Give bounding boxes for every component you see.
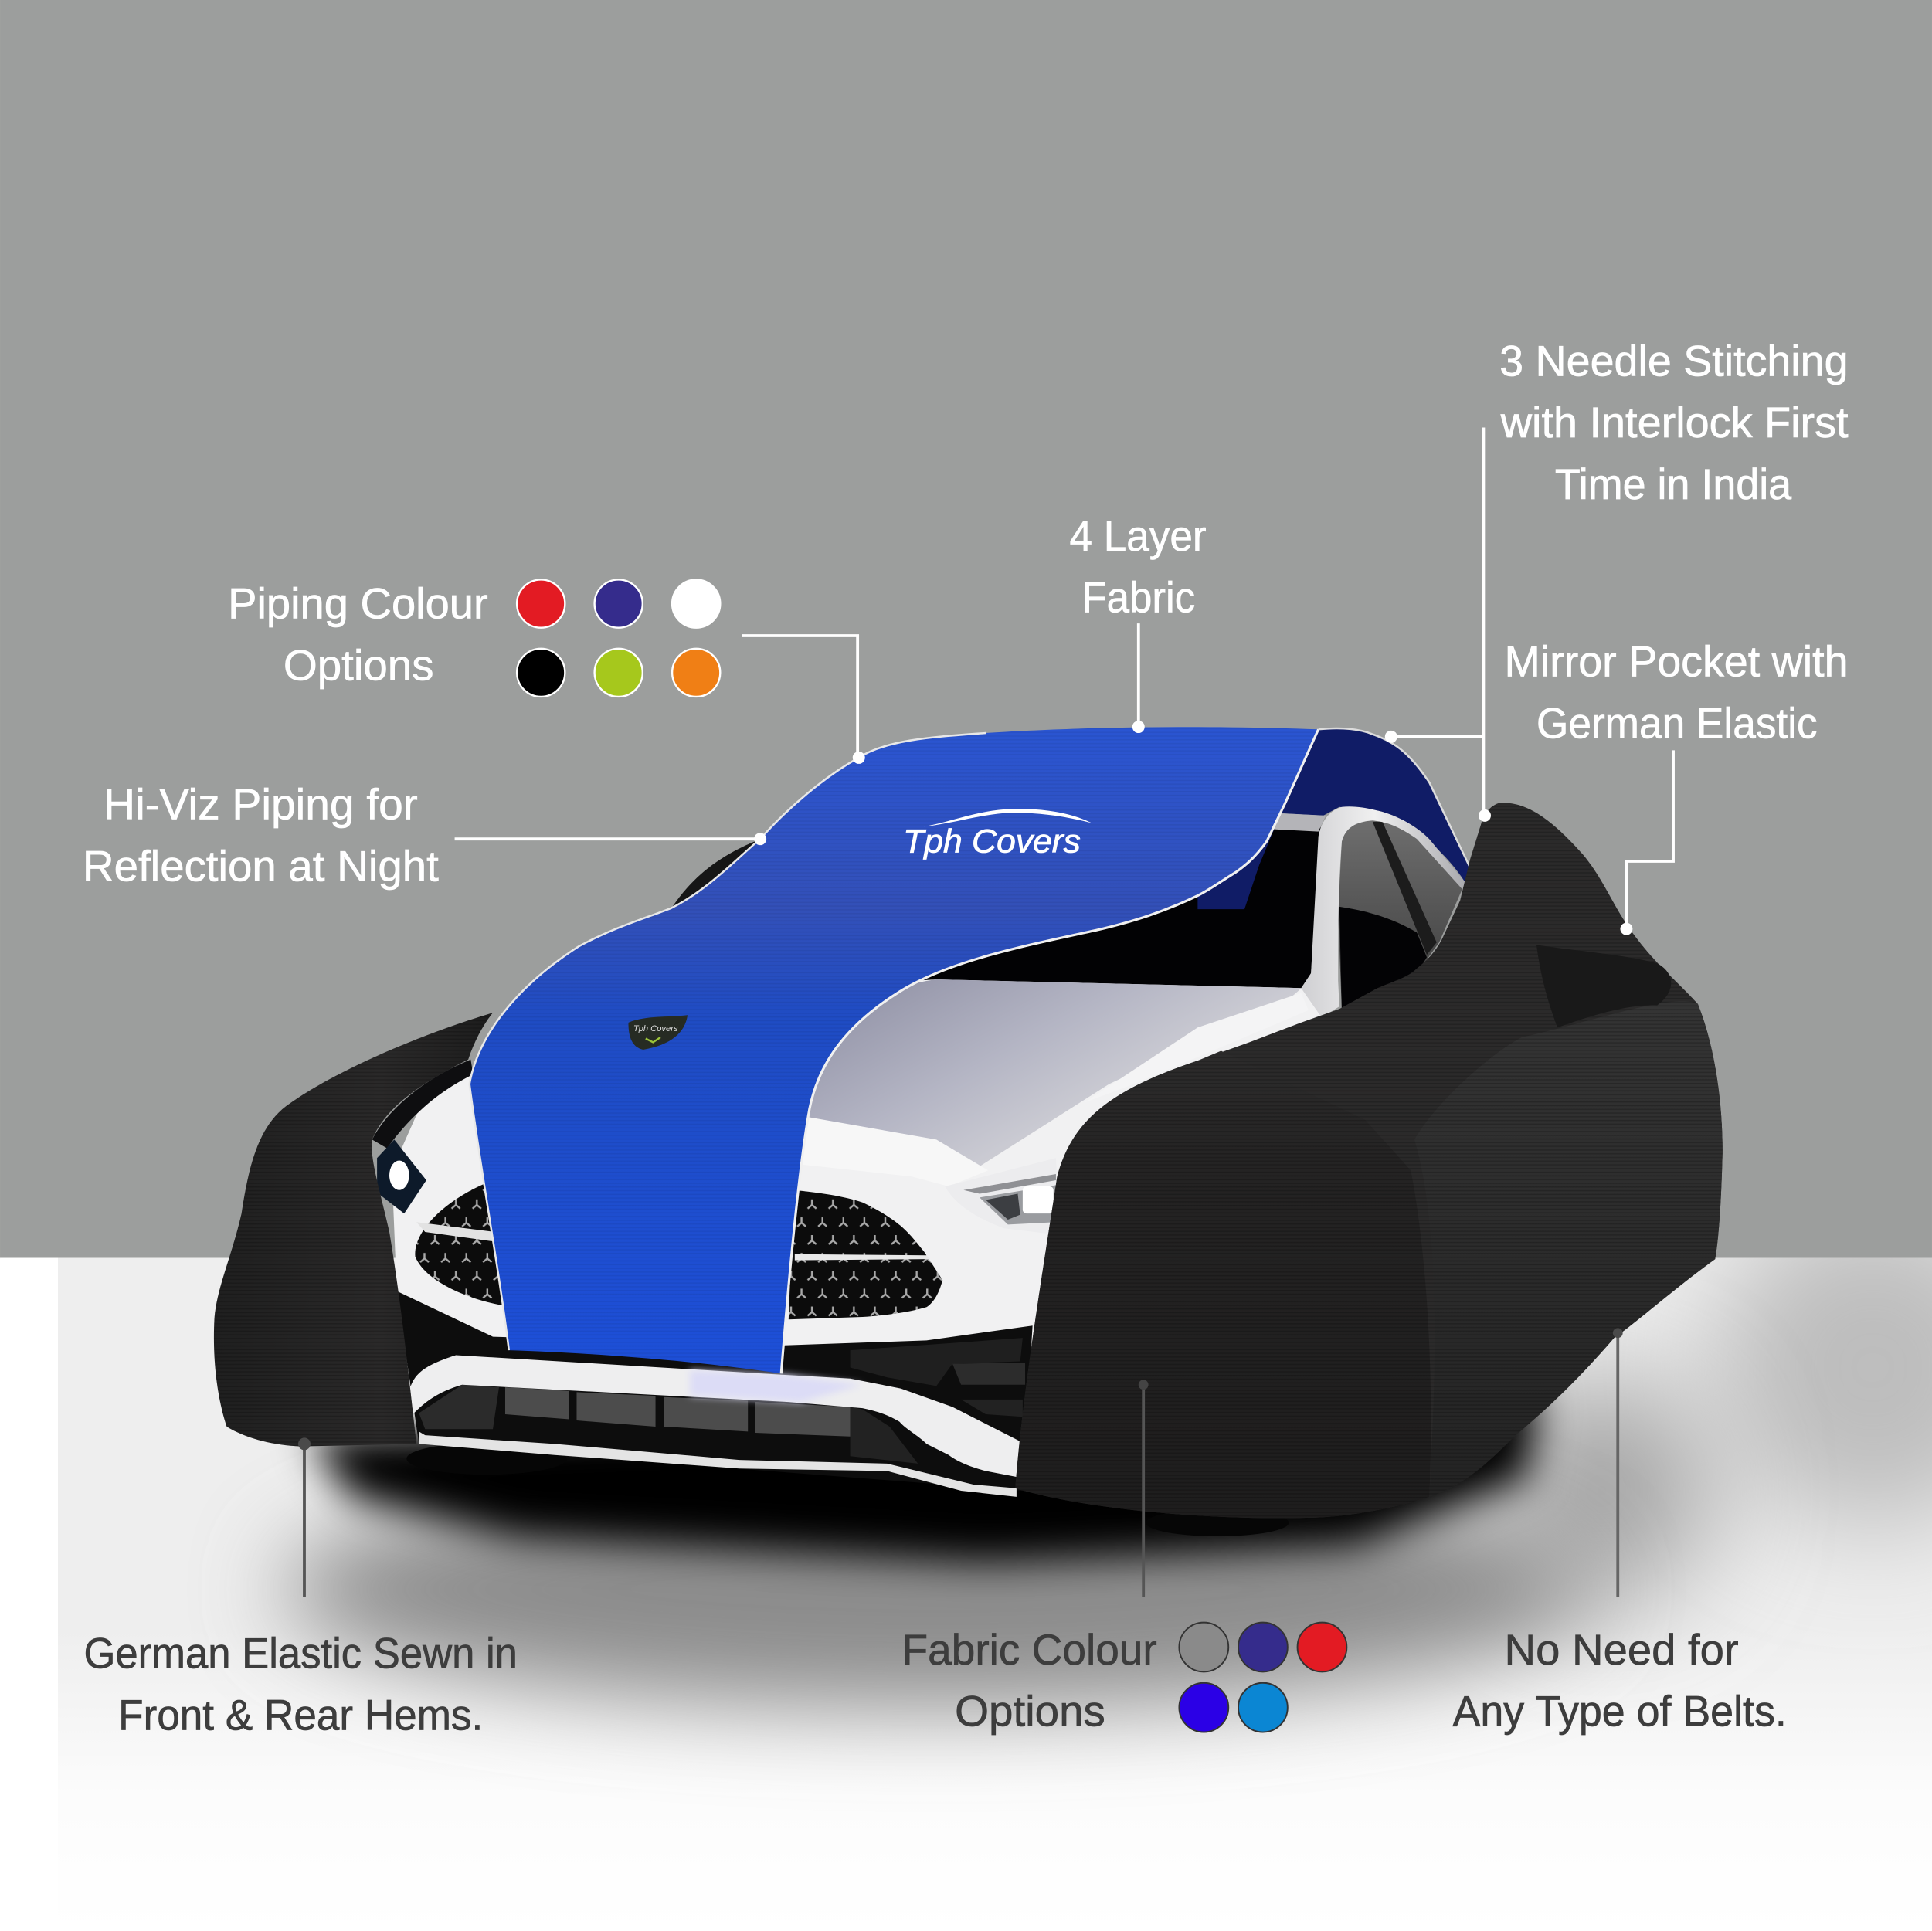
logo: Tph Covers: Tph Covers xyxy=(903,823,1081,860)
leader: fabric colour xyxy=(1139,1380,1149,1597)
car body xyxy=(372,728,1470,1536)
leader: 4 layer fabric xyxy=(1132,623,1145,733)
backdrop: grey wall xyxy=(0,0,1932,1259)
backdrop: floor xyxy=(0,1257,1932,1736)
front wing shade xyxy=(1015,1051,1431,1518)
text: piping colour options: Piping Colour xyxy=(228,579,488,628)
text: fabric colour options xyxy=(902,1625,1157,1736)
text: piping colour options xyxy=(228,579,488,689)
text: 3 needle stitching: with Interlock First xyxy=(1500,398,1849,446)
leader: no belts xyxy=(1613,1328,1623,1597)
blue cover stripe xyxy=(470,727,1319,1373)
right headlight xyxy=(945,1158,1060,1234)
front body xyxy=(392,979,1321,1346)
roof underside xyxy=(1197,728,1470,909)
leader: 3 needle stitching xyxy=(1385,427,1491,822)
logo: Tph Covers xyxy=(903,809,1092,860)
rear tyre xyxy=(1146,1509,1289,1536)
lower bumper opening xyxy=(397,1291,1033,1491)
side window xyxy=(1338,820,1462,1010)
text: 4 layer fabric: Fabric xyxy=(1081,573,1195,622)
black cover: right side and rear xyxy=(1015,803,1723,1518)
swatches: piping colours xyxy=(517,579,720,697)
roof header strip xyxy=(1272,813,1326,832)
text: no belts: No Need for xyxy=(1505,1625,1739,1674)
text: german elastic hems: German Elastic Sewn in xyxy=(83,1629,518,1678)
text: german elastic hems: Front & Rear Hems. xyxy=(118,1690,483,1739)
right grille xyxy=(789,1190,942,1319)
text: no belts: Any Type of Belts. xyxy=(1453,1687,1787,1736)
leader: piping colour xyxy=(742,636,865,764)
text: 3 needle stitching: 3 Needle Stitching xyxy=(1499,336,1849,385)
black cover: left front xyxy=(214,1013,493,1447)
leader: mirror pocket xyxy=(1620,750,1673,935)
windscreen xyxy=(912,813,1321,990)
text: fabric colour options: Options xyxy=(955,1687,1105,1736)
hood crease plane xyxy=(799,1116,988,1186)
text: mirror pocket xyxy=(1505,637,1849,747)
text: german elastic hems xyxy=(83,1629,518,1739)
rear upper dark wing xyxy=(671,838,764,908)
bumper blade tint xyxy=(690,1370,863,1402)
front left tyre xyxy=(406,1443,567,1475)
side intake xyxy=(851,1338,1023,1386)
left headlight xyxy=(377,1139,426,1213)
leader: hi-viz piping xyxy=(455,833,766,845)
mirror pocket xyxy=(1536,945,1671,1027)
text: mirror pocket: Mirror Pocket with xyxy=(1505,637,1849,686)
rear panel shade xyxy=(1414,1001,1723,1497)
badge: shield: Tph Covers xyxy=(633,1024,678,1033)
lower lip xyxy=(419,1431,1017,1497)
text: hi-viz piping: Hi-Viz Piping for xyxy=(104,780,418,829)
swatches: fabric colours xyxy=(1179,1623,1346,1732)
white bumper blade xyxy=(409,1355,1020,1477)
text: no belts xyxy=(1453,1625,1787,1736)
hood highlight xyxy=(1085,993,1309,1103)
text: 3 needle stitching: Time in India xyxy=(1555,460,1792,508)
text: mirror pocket: German Elastic xyxy=(1536,698,1818,747)
a-pillar xyxy=(1301,806,1465,1016)
leader: german elastic hems xyxy=(298,1437,311,1597)
badge: shield xyxy=(628,1015,688,1050)
car shadow on floor xyxy=(284,1392,1590,1706)
roof piping xyxy=(1319,728,1470,867)
text: hi-viz piping: Reflection at Night xyxy=(83,841,439,890)
bumper vents xyxy=(419,1385,918,1464)
text: 3 needle stitching xyxy=(1499,336,1849,508)
left cover gap xyxy=(372,1060,474,1149)
text: piping colour options: Options xyxy=(284,640,433,689)
left grille xyxy=(415,1183,505,1306)
weave xyxy=(1015,803,1723,1518)
text: 4 layer fabric xyxy=(1069,511,1207,622)
text: fabric colour options: Fabric Colour xyxy=(902,1625,1157,1674)
text: 4 layer fabric: 4 Layer xyxy=(1069,511,1207,560)
hood xyxy=(801,979,1301,1170)
text: hi-viz piping xyxy=(83,780,439,890)
